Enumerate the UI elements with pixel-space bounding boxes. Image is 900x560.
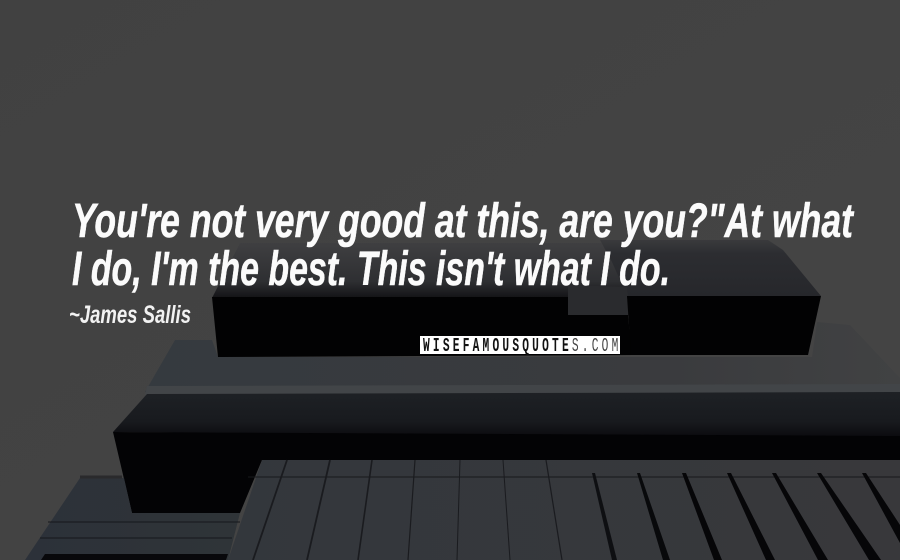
lower left terrace bbox=[25, 478, 240, 560]
black front face bbox=[113, 432, 900, 513]
lower left black strip bbox=[41, 554, 228, 560]
building illustration bbox=[25, 240, 900, 560]
quote line 2: I do, I'm the best. This isn't what I do. bbox=[72, 243, 670, 296]
floor slats bbox=[40, 460, 900, 560]
watermark badge: WISEFAMOUSQUOTES.COM bbox=[423, 335, 618, 357]
rear rooftop left bbox=[212, 243, 640, 298]
lower right ribbed floor bbox=[228, 460, 900, 560]
gap between blocks bbox=[568, 285, 630, 316]
upper terrace bbox=[145, 322, 900, 392]
dark middle band bbox=[113, 392, 900, 438]
left black block bbox=[212, 297, 632, 357]
terrace edge highlight bbox=[145, 384, 900, 395]
quote text bbox=[72, 195, 854, 296]
right black block bbox=[627, 296, 821, 355]
rear rooftop right bbox=[600, 240, 821, 296]
author attribution: ~James Sallis bbox=[69, 301, 191, 329]
